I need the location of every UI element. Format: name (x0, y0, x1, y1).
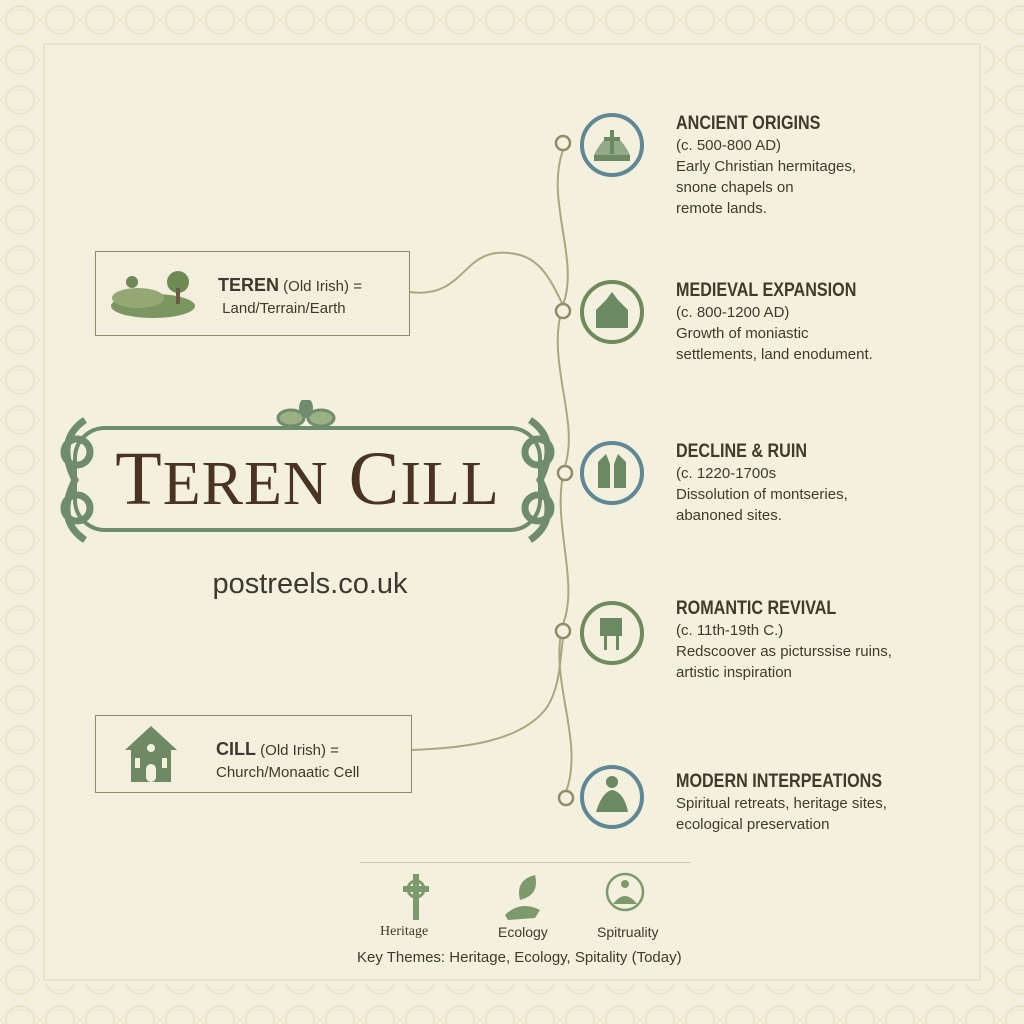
timeline entry: decline: Dissolution of montseries, (676, 486, 848, 503)
timeline entry: medieval: MEDIEVAL EXPANSION (676, 280, 856, 301)
timeline entry: decline: abanoned sites. (676, 507, 782, 524)
timeline entry: ancient origins (676, 113, 856, 217)
box: CILL definition (95, 715, 412, 793)
timeline entry: medieval (676, 280, 873, 363)
title frame (60, 400, 554, 543)
timeline entry: decline (676, 441, 848, 524)
timeline entry: romantic revival: ROMANTIC REVIVAL (676, 598, 836, 619)
box: TEREN definition (95, 251, 410, 336)
timeline entry: romantic revival (676, 598, 892, 681)
timeline entry: ancient origins: (c. 500-800 AD) (676, 137, 781, 154)
box: TEREN definition: Land/Terrain/Earth (222, 300, 346, 317)
timeline entry: romantic revival: (c. 11th-19th C.) (676, 622, 783, 639)
timeline entry: medieval: Growth of moniastic (676, 325, 809, 342)
box: CILL definition: Church/Monaatic Cell (216, 764, 359, 781)
timeline entry: romantic revival: artistic inspiration (676, 664, 792, 681)
website: postreels.co.uk (212, 568, 408, 600)
timeline entry: modern (676, 771, 887, 833)
key themes: Spitruality (597, 924, 658, 940)
timeline entry: medieval: settlements, land enodument. (676, 346, 873, 363)
key themes (357, 862, 690, 966)
timeline entry: ancient origins: ANCIENT ORIGINS (676, 113, 820, 134)
theme icons (403, 872, 644, 920)
timeline entry: decline: DECLINE & RUIN (676, 441, 807, 462)
timeline entry: modern: MODERN INTERPEATIONS (676, 771, 882, 792)
timeline entry: modern: ecological preservation (676, 816, 829, 833)
timeline entry: medieval: (c. 800-1200 AD) (676, 304, 789, 321)
timeline entry: decline: (c. 1220-1700s (676, 465, 776, 482)
timeline entry: romantic revival: Redscoover as picturssise ruins, (676, 643, 892, 660)
timeline entry: modern: Spiritual retreats, heritage sites, (676, 795, 887, 812)
title text: TEREN CILL (115, 437, 500, 521)
key themes: Ecology (498, 924, 548, 940)
timeline icons (580, 113, 644, 829)
timeline entry: ancient origins: Early Christian hermitages, (676, 158, 856, 175)
box: CILL definition: CILL (Old Irish) = (216, 739, 339, 759)
key themes: Heritage (380, 924, 428, 939)
icon: church (125, 726, 177, 782)
timeline entry: ancient origins: snone chapels on (676, 179, 794, 196)
box: TEREN definition: TEREN (Old Irish) = (218, 275, 362, 295)
key themes: Key Themes: Heritage, Ecology, Spitality (Today) (357, 949, 682, 966)
icon: landscape (111, 271, 195, 318)
timeline entry: ancient origins: remote lands. (676, 200, 767, 217)
